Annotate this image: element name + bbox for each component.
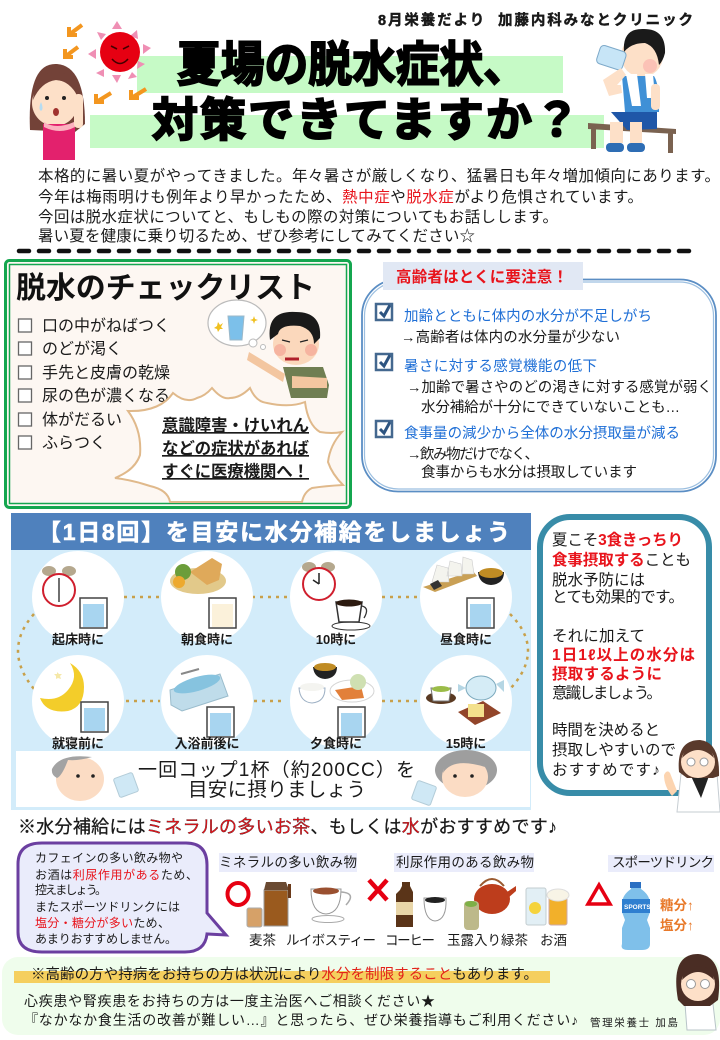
icon: rice balls and miso soup — [423, 557, 504, 592]
drink category headings: ミネラルの多い飲み物 — [219, 855, 357, 870]
callout: caffeine warning: カフェインの多い飲み物や — [35, 850, 183, 865]
icon: rooibos tea — [311, 888, 350, 922]
time labels: 就寝前に — [52, 736, 104, 751]
callout: seek medical attention: 意識障害・けいれん — [162, 416, 309, 435]
panel: eat three meals advice: 食事摂取することも — [552, 550, 691, 569]
caution items: 水分補給が十分にできていないことも… — [421, 399, 680, 416]
time labels — [52, 632, 492, 751]
panel: eat three meals advice: 脱水予防には — [552, 571, 645, 589]
checklist items: 手先と皮膚の乾燥 — [42, 364, 170, 382]
panel: eat three meals advice: 摂取するように — [552, 665, 662, 683]
callout: caffeine warning: お酒は利尿作用があるため、 — [35, 867, 198, 882]
icon: glass of water lunch — [467, 598, 494, 628]
panel: eat three meals advice: おすすめです♪ — [552, 761, 660, 779]
icon: bathtub — [170, 669, 228, 711]
icon: caution mark — [588, 885, 610, 904]
icon: coffee bottle and cup — [396, 882, 446, 927]
panel: dehydration checklist — [6, 260, 350, 508]
time labels: 朝食時に — [181, 632, 233, 647]
icon: breakfast plate — [170, 558, 226, 594]
time labels: 昼食時に — [440, 632, 492, 647]
drink category headings: スポーツドリンク — [612, 855, 714, 870]
caution items — [401, 308, 712, 481]
time labels: 夕食時に — [310, 736, 362, 751]
panel: eat three meals advice: 時間を決めると — [552, 721, 660, 739]
caution items: 加齢とともに体内の水分が不足しがち — [404, 308, 652, 325]
panel: eight times a day — [11, 513, 531, 810]
icon: barley tea — [247, 882, 291, 927]
checklist heading: 脱水のチェックリスト — [16, 272, 315, 305]
caution items: 食事からも水分は摂取しています — [421, 464, 637, 481]
panel: eat three meals advice: 意識しましょう。 — [552, 684, 662, 702]
intro text: 本格的に暑い夏がやってきました。年々暑さが厳しくなり、猛暑日も年々増加傾向にあります。 — [38, 167, 720, 185]
drink labels: 玉露入り緑茶 — [447, 933, 528, 948]
section heading — [11, 513, 531, 550]
caution items: →高齢者は体内の水分量が少ない — [401, 329, 620, 346]
panel: restriction note: 管理栄養士 加島 — [590, 1016, 678, 1029]
intro text: 暑い夏を健康に乗り切るため、ぜひ参考にしてみてください☆ — [38, 227, 475, 245]
icon: thought bubble with water glass — [208, 300, 266, 350]
sugar salt note: 塩分↑ — [660, 917, 694, 933]
icon: sweating woman — [30, 64, 85, 160]
icon: alarm clock wake up — [42, 566, 76, 606]
panel: restriction note: 心疾患や腎疾患をお持ちの方は一度主治医へご相談ください★ — [24, 993, 435, 1009]
strip: one cup guidance — [16, 750, 530, 807]
checklist items: 尿の色が濃くなる — [42, 387, 170, 405]
icon: sports drink bottle: SPORTS — [624, 904, 651, 911]
panel: elderly caution — [362, 262, 716, 492]
icon: bad mark — [369, 880, 387, 900]
icon: coffee cup — [332, 600, 370, 630]
icon: elderly man with glass — [52, 756, 139, 801]
icon: pointing doctor — [664, 740, 720, 812]
header note: 8月栄養だより 加藤内科みなとクリニック — [378, 11, 693, 29]
icon: alarm clock ten — [302, 562, 335, 600]
drink labels: コーヒー — [385, 933, 435, 948]
sugar salt note — [660, 897, 694, 933]
drink labels — [249, 933, 567, 948]
icon: teapot and green tea — [464, 879, 516, 930]
icon: glass of water dinner — [338, 707, 365, 737]
checklist items — [18, 317, 170, 452]
callout: caffeine warning: またスポーツドリンクには — [35, 900, 180, 914]
callout: caffeine warning: 控えましょう。 — [35, 883, 107, 897]
time labels: 15時に — [446, 736, 486, 751]
icon: dinner set — [299, 663, 374, 703]
panel: restriction note — [2, 957, 720, 1035]
intro text: 今回は脱水症状についてと、もしもの際の対策についてもお話しします。 — [38, 208, 558, 226]
icon: elderly woman with glass — [411, 750, 497, 806]
panel: eat three meals advice: 夏こそ3食きっちり — [552, 530, 683, 549]
intro text: 今年は梅雨明けも例年より早かったため、熱中症や脱水症がより危惧されています。 — [38, 188, 643, 206]
panel: eat three meals advice: それに加えて — [552, 627, 645, 645]
callout: seek medical attention — [115, 388, 343, 502]
checklist items: のどが渇く — [42, 340, 122, 358]
strip: one cup guidance: 目安に摂りましょう — [188, 779, 366, 801]
panel: eat three meals advice: 1日1ℓ以上の水分は — [552, 646, 695, 664]
drink category headings — [219, 853, 714, 872]
drink category headings: 利尿作用のある飲み物 — [396, 855, 534, 870]
panel: restriction note: 『なかなか食生活の改善が難しい…』と思ったら、ぜひ栄養指導もご利用ください♪ — [24, 1012, 578, 1028]
icon: glass of water bedtime — [81, 702, 108, 732]
time labels: 入浴前後に — [174, 736, 240, 751]
panel: eat three meals advice: 摂取しやすいので — [552, 741, 676, 759]
icon: boy drinking water on bench — [588, 29, 676, 153]
panel: elderly caution: 高齢者はとくに要注意！ — [396, 268, 568, 286]
icon: lemon sour and beer — [526, 888, 569, 925]
recommendation heading: ※水分補給にはミネラルの多いお茶、もしくは水がおすすめです♪ — [18, 817, 557, 837]
callout: caffeine warning: あまりおすすめしません。 — [35, 932, 177, 946]
panel: eat three meals advice — [540, 517, 709, 793]
dotted route — [18, 597, 528, 701]
panel: restriction note: ※高齢の方や持病をお持ちの方は状況により水分を制限することもあります。 — [31, 966, 538, 983]
checklist items: ふらつく — [42, 435, 106, 452]
icon: glass of water bath — [207, 707, 234, 737]
panel: eight times a day: 【1日8回】を目安に水分補給をしましょう — [38, 519, 510, 545]
sugar salt note: 糖分↑ — [660, 897, 694, 913]
title with green bands: 夏場の脱水症状、 — [177, 39, 527, 92]
callout: caffeine warning — [18, 843, 226, 952]
time labels: 起床時に — [52, 632, 104, 647]
caution items: →飲み物だけでなく、 — [407, 446, 539, 463]
drink labels: ルイボスティー — [286, 933, 376, 948]
checklist items: 体がだるい — [42, 411, 122, 429]
icon: good mark — [228, 883, 248, 905]
callout: seek medical attention: すぐに医療機関へ！ — [162, 462, 309, 481]
icon: glass of milk breakfast — [209, 598, 236, 628]
callout: seek medical attention: などの症状があれば — [162, 438, 310, 458]
icon: sports drink bottle — [622, 882, 651, 950]
drink labels: 麦茶 — [249, 933, 276, 948]
drink labels: お酒 — [540, 933, 567, 948]
caution items: 食事量の減少から全体の水分摂取量が減る — [404, 425, 680, 442]
caution items: →加齢で暑さやのどの渇きに対する感覚が弱く — [407, 379, 712, 396]
checklist items: 口の中がねばつく — [42, 317, 170, 335]
strip: one cup guidance: 一回コップ1杯（約200CC）を — [138, 759, 415, 781]
intro text — [38, 167, 720, 245]
title with green bands — [90, 39, 604, 148]
icon: glass of water wake up — [80, 598, 107, 628]
icon: dietitian — [676, 954, 719, 1030]
callout: caffeine warning: 塩分・糖分が多いため、 — [35, 915, 170, 930]
icon: angry sun with arrows — [65, 21, 151, 102]
panel: eat three meals advice: とても効果的です。 — [552, 588, 684, 606]
time labels: 10時に — [316, 632, 356, 647]
caution items: 暑さに対する感覚機能の低下 — [404, 358, 597, 375]
icon: dehydrated man — [247, 312, 329, 398]
title with green bands: 対策できてますか？ — [152, 94, 580, 146]
check icons — [376, 304, 392, 437]
icon: crescent moon — [40, 663, 84, 711]
icon: tea set and snack — [426, 676, 504, 725]
time circles — [32, 551, 512, 747]
caution heading — [383, 262, 583, 290]
